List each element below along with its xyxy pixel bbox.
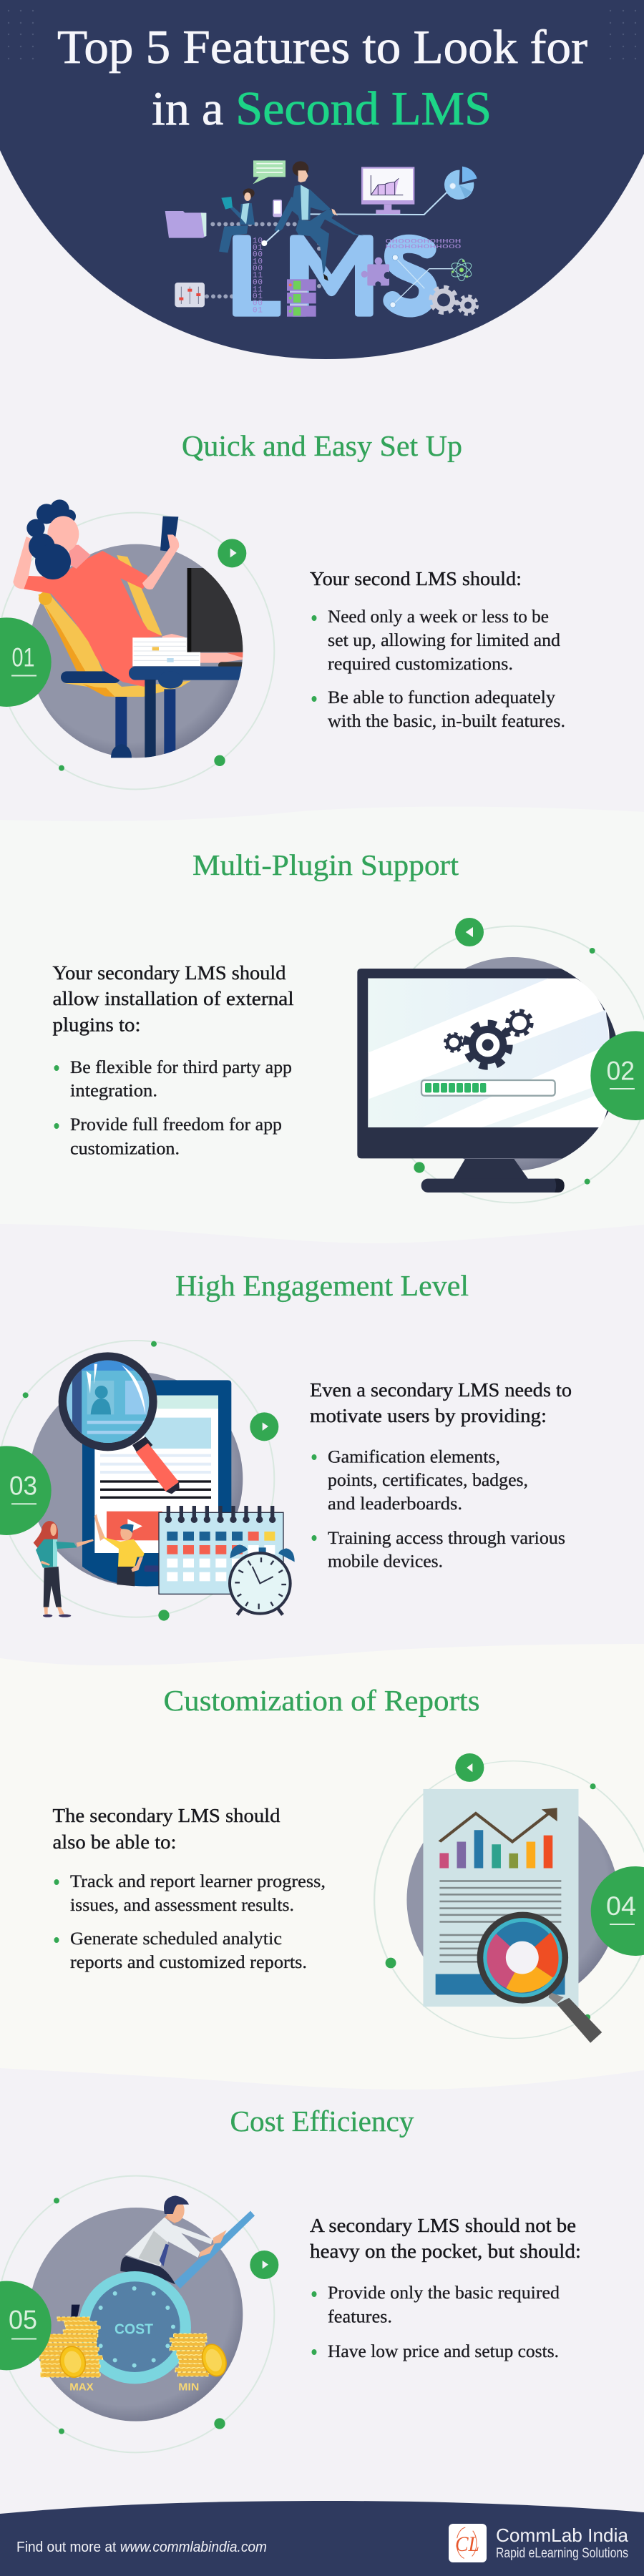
icon: puzzle piece <box>361 258 391 287</box>
text block: Training access through various <box>328 1529 565 1548</box>
icon: coin stacks <box>39 2317 209 2377</box>
labels: dial: COST <box>114 2321 153 2337</box>
text block: mobile devices. <box>328 1552 443 1572</box>
text block: Need only a week or less to be <box>328 607 549 627</box>
icon: folder <box>165 211 206 238</box>
text block: integration. <box>70 1082 157 1100</box>
icon: binary digits: 10 <box>253 258 263 266</box>
text block: Gamification elements, <box>328 1448 500 1466</box>
icon: alarm clock <box>230 1544 295 1615</box>
icon: binary digits: 01 <box>253 293 263 301</box>
heading: Customization of Reports <box>163 1684 479 1717</box>
icon: atom <box>449 259 474 281</box>
text block <box>310 1379 572 1572</box>
illustration: woman at desk <box>0 499 274 789</box>
icon: binary digits: 11 <box>253 272 263 280</box>
text block <box>310 2215 581 2361</box>
text block: required customizations. <box>328 655 513 674</box>
labels: dial: MAX <box>69 2381 94 2394</box>
icon: man waving <box>94 1514 145 1586</box>
text block: Your secondary LMS should <box>53 962 286 984</box>
icon: woman with red hair <box>34 1521 94 1617</box>
icon: magnifier <box>59 1352 180 1494</box>
text block: reports and customized reports. <box>70 1953 307 1972</box>
icon: slider panel <box>175 283 205 307</box>
text block: Be flexible for third party app <box>70 1058 292 1077</box>
icon: binary digits: 00 <box>253 300 263 308</box>
text block: set up, allowing for limited and <box>328 631 561 650</box>
panel: section 5 cost efficiency <box>0 2105 581 2452</box>
icon: monitor with chart <box>361 167 414 214</box>
logo: CommLab India <box>449 2524 629 2562</box>
icon: server stack <box>287 279 316 317</box>
logo: CommLab India: CommLab India <box>496 2524 629 2546</box>
badge: 03: 03 <box>9 1471 37 1500</box>
text: find out more: Find out more at www.commlabindia.com <box>16 2540 267 2555</box>
labels: dial: MIN <box>178 2381 199 2394</box>
icon: gears <box>445 1011 532 1067</box>
text block: Even a secondary LMS needs to <box>310 1379 572 1401</box>
text block: allow installation of external <box>53 988 293 1009</box>
text block <box>53 1805 326 1972</box>
panel: footer <box>0 2501 644 2576</box>
badge: 04: 04 <box>606 1891 636 1921</box>
text block: Have low price and setup costs. <box>328 2342 559 2361</box>
text block: plugins to: <box>53 1014 140 1036</box>
logo: CommLab India: CL <box>455 2532 479 2556</box>
icon: binary digits: 01 <box>253 307 263 315</box>
icon: binary digits <box>253 237 462 315</box>
illustration: LMS hero <box>165 160 478 317</box>
text block: and leaderboards. <box>328 1494 462 1514</box>
text block: Track and report learner progress, <box>70 1872 326 1891</box>
icon: binary digits: 11 <box>253 285 263 294</box>
icon: binary digits: HOOHOHOHHOOO <box>385 244 462 250</box>
illustration: report with magnifier <box>374 1753 644 2043</box>
title: in a Second LMS <box>152 82 492 135</box>
panel: section 3 high engagement level <box>0 1269 572 1621</box>
illustration: tablet, magnifier, calendar and clock <box>0 1341 295 1621</box>
text block: Provide full freedom for app <box>70 1115 282 1135</box>
icon: LMS letters <box>233 235 428 317</box>
heading: Quick and Easy Set Up <box>182 429 462 462</box>
heading: Cost Efficiency <box>230 2105 414 2137</box>
icon: binary digits: 00 <box>253 279 263 288</box>
text block: Provide only the basic required <box>328 2283 560 2303</box>
icon: gears <box>431 287 477 314</box>
icon: binary digits: OHOOOOHOHHOH <box>385 239 462 245</box>
badge: 05: 05 <box>9 2306 37 2335</box>
panel: section 1 quick and easy set up <box>0 429 565 789</box>
text block: issues, and assessment results. <box>70 1896 294 1915</box>
text block: features. <box>328 2308 392 2326</box>
icon: binary digits: 01 <box>253 244 263 253</box>
icon: small reader <box>219 188 255 253</box>
panel: section 2 multi-plugin support <box>53 848 644 1203</box>
heading: High Engagement Level <box>175 1269 469 1302</box>
panel: header <box>0 0 644 359</box>
text block: heavy on the pocket, but should: <box>310 2240 581 2262</box>
text block: customization. <box>70 1139 180 1159</box>
text block: Your second LMS should: <box>310 568 522 589</box>
illustration: cost dial with coins <box>0 2176 278 2452</box>
icon: binary digits: 10 <box>253 237 263 246</box>
icon: pie chart <box>444 167 478 200</box>
text block <box>53 962 293 1159</box>
icon: speech bubble <box>253 160 286 184</box>
badge: 02: 02 <box>607 1056 635 1085</box>
icon: binary digits: 00 <box>253 251 263 260</box>
text block <box>310 568 565 731</box>
illustration: monitor with gears <box>357 918 644 1203</box>
text block: Be able to function adequately <box>328 688 556 707</box>
title: Top 5 Features to Look for <box>57 21 587 74</box>
heading: Multi-Plugin Support <box>192 848 459 881</box>
badge: 01: 01 <box>11 643 34 672</box>
text block: with the basic, in-built features. <box>328 712 565 731</box>
text block: points, certificates, badges, <box>328 1471 528 1490</box>
icon: phone <box>273 200 282 217</box>
title <box>57 21 587 135</box>
text block: The secondary LMS should <box>53 1805 280 1826</box>
panel: section 4 customization of reports <box>53 1684 644 2043</box>
icon: binary digits: 00 <box>253 265 263 273</box>
icon: calendar <box>159 1506 283 1594</box>
icon: seated man <box>261 161 364 281</box>
text block: Generate scheduled analytic <box>70 1929 282 1949</box>
text block: motivate users by providing: <box>310 1405 547 1426</box>
labels: dial <box>69 2321 199 2394</box>
progress bar <box>421 1080 555 1096</box>
text block: A secondary LMS should not be <box>310 2215 576 2236</box>
text block: also be able to: <box>53 1831 176 1853</box>
